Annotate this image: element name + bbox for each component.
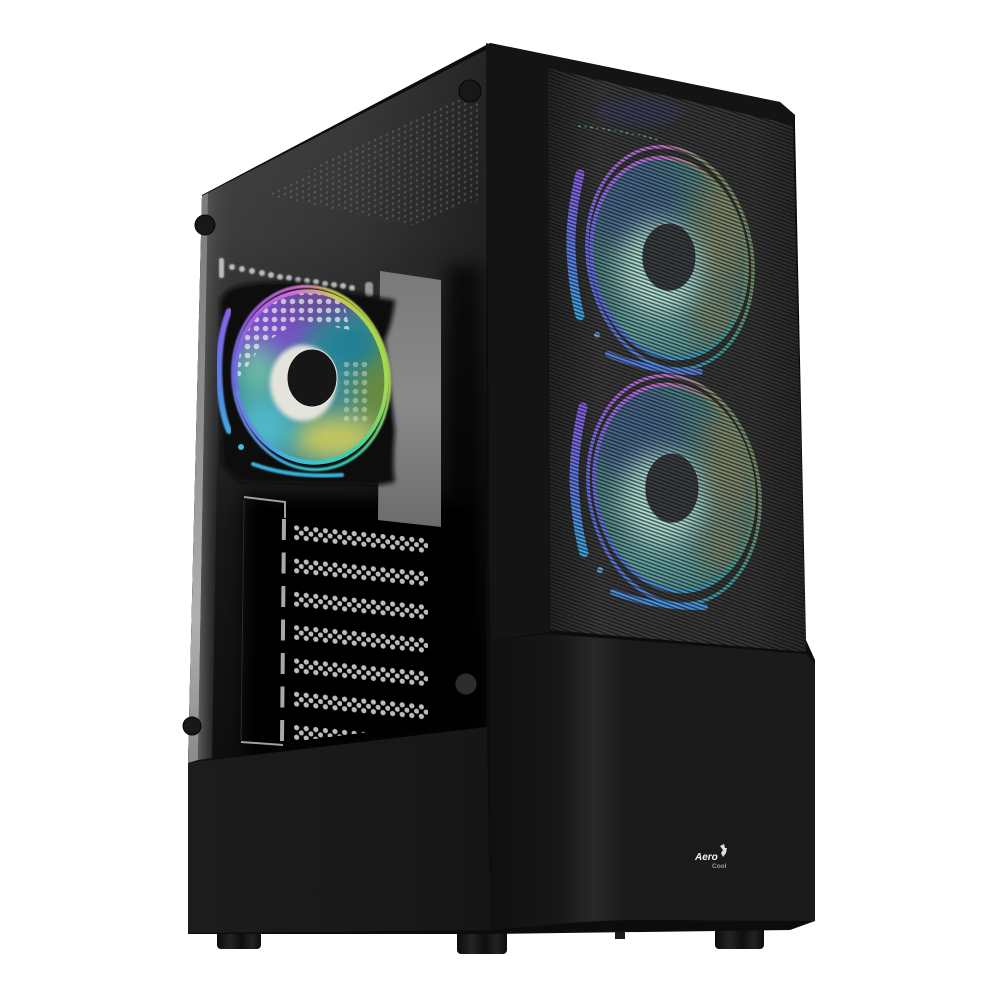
PCI expansion slot vents (294, 525, 428, 740)
fan hub (287, 349, 337, 407)
AeroCool logo (694, 844, 727, 870)
fan face rim (578, 372, 770, 604)
product illustration: PC tower case (182, 43, 815, 954)
top perforated area (265, 92, 478, 225)
outer ring (570, 133, 770, 383)
hub (645, 453, 699, 523)
front top lip (490, 43, 795, 125)
left arc (574, 407, 584, 553)
fan face rim (576, 145, 762, 371)
front fan lower (570, 374, 762, 610)
rear fan exhaust hole strip (219, 258, 373, 297)
front mesh panel (548, 68, 806, 652)
fan face rim (222, 279, 400, 475)
hub (642, 223, 696, 291)
glass left edge highlight (188, 193, 208, 763)
glass edge soft band (198, 186, 222, 760)
PSU bay / drive cage (241, 497, 285, 745)
mesh overlay (548, 68, 806, 652)
motherboard tray gray panel (378, 271, 441, 527)
feet (217, 918, 764, 954)
inner glow top (595, 98, 685, 126)
left base panel (188, 727, 490, 933)
fan bottom arc (253, 464, 342, 476)
front pillar (486, 43, 549, 640)
front base panel (490, 634, 815, 930)
fan small light dot (238, 444, 244, 450)
side fan (234, 289, 388, 465)
hub crescent (270, 345, 336, 421)
faint light trace (578, 126, 660, 140)
outer ring (570, 362, 778, 618)
fan outer RGB ring (218, 274, 404, 482)
screws (183, 80, 481, 735)
case body silhouette (188, 43, 815, 934)
AeroCool logo: Aero (694, 852, 718, 863)
side glass panel (188, 50, 490, 771)
bottom arc (613, 592, 705, 607)
fan left arc (219, 311, 229, 431)
small light dot (597, 567, 603, 573)
left arc (571, 174, 580, 316)
lower bay shadow (245, 495, 490, 760)
bottom arc (608, 354, 700, 372)
right interior shadow (447, 265, 481, 505)
small light dot (594, 332, 600, 338)
front fan upper (566, 145, 755, 375)
AeroCool logo: Cool (712, 863, 727, 870)
fan frame (220, 282, 395, 485)
